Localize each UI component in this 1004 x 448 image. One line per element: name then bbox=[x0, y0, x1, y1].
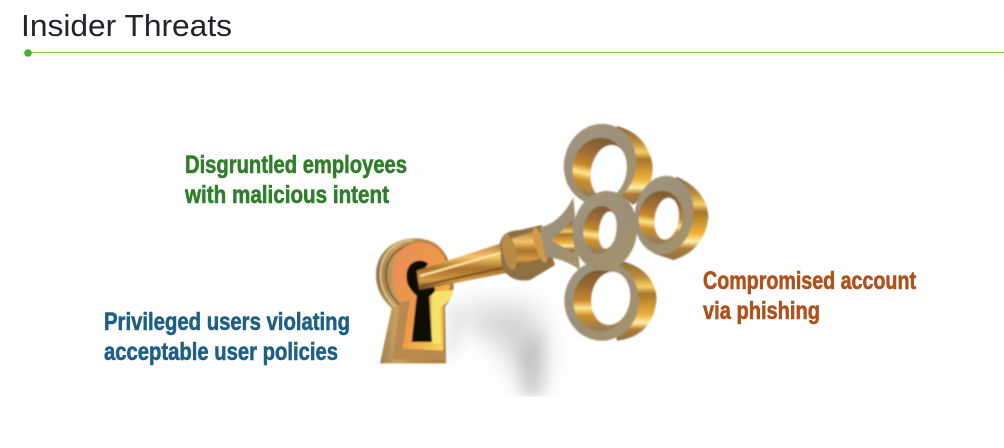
label: privileged users: acceptable user policies bbox=[104, 338, 338, 366]
label: privileged users bbox=[104, 308, 350, 366]
label: compromised account: via phishing bbox=[703, 297, 820, 325]
key and keyhole illustration bbox=[376, 117, 708, 397]
label: disgruntled employees bbox=[184, 151, 407, 209]
key neck bbox=[540, 197, 580, 270]
key collar bbox=[499, 225, 555, 281]
label: privileged users: Privileged users violating bbox=[104, 308, 350, 336]
label: disgruntled employees: Disgruntled employees bbox=[185, 151, 407, 179]
title underline with dot bbox=[24, 49, 1004, 57]
ring: top bbox=[556, 117, 653, 212]
key shaft bbox=[417, 243, 508, 290]
label: compromised account bbox=[703, 267, 917, 325]
ring: bottom bbox=[564, 260, 657, 341]
label: compromised account: Compromised account bbox=[703, 267, 917, 295]
label: disgruntled employees: with malicious intent bbox=[184, 181, 390, 209]
ring: right bbox=[629, 172, 708, 260]
keyhole plate bbox=[376, 238, 454, 363]
title: Insider Threats bbox=[21, 8, 232, 43]
ring: center bbox=[568, 187, 642, 275]
